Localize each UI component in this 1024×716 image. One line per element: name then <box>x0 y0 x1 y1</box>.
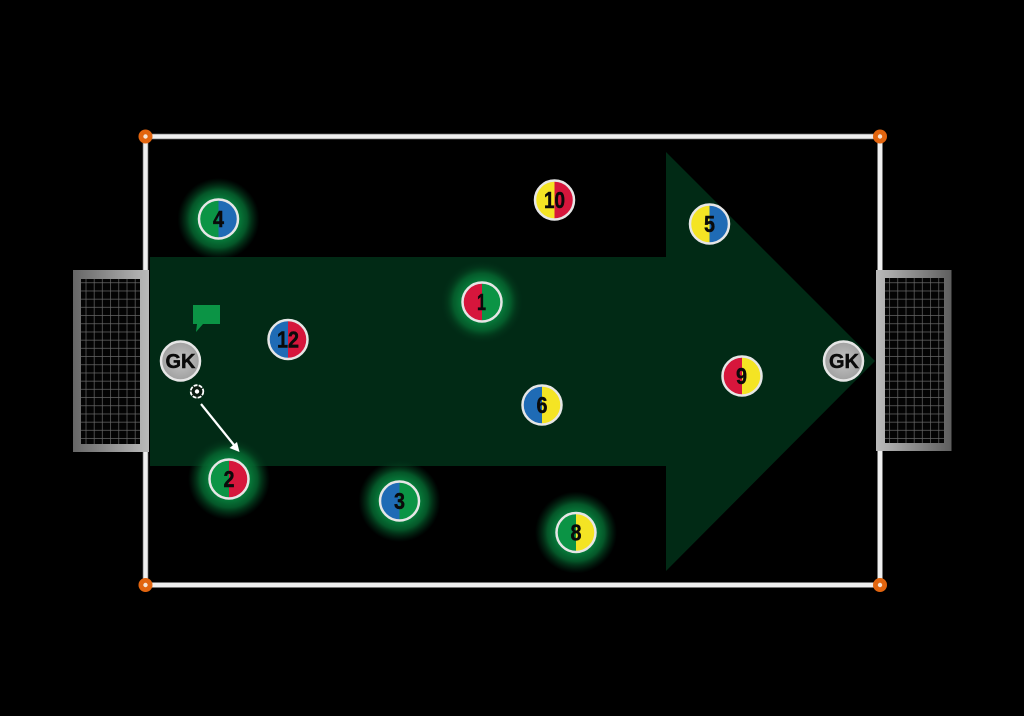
player 6: 6 <box>536 392 548 418</box>
attack direction arrow <box>150 152 875 571</box>
player 3: 3 <box>394 488 405 514</box>
player 3 <box>358 460 440 542</box>
speech bubble icon <box>193 305 220 332</box>
player 2 <box>188 438 270 520</box>
goalkeeper right <box>824 342 863 380</box>
player 10 <box>535 180 574 220</box>
player 9: 9 <box>736 363 747 389</box>
player 8: 8 <box>570 520 582 546</box>
corner marker: bottom left <box>138 578 152 592</box>
player 9 <box>722 356 762 396</box>
corner marker: bottom right <box>873 578 887 592</box>
player 4 <box>178 178 260 260</box>
left goal <box>73 270 149 452</box>
corner marker: top left <box>138 130 152 144</box>
goalkeeper left: GK <box>166 351 196 373</box>
player 5: 5 <box>704 211 715 237</box>
player 10: 10 <box>544 187 565 213</box>
goalkeeper right: GK <box>829 351 860 373</box>
players <box>161 178 863 574</box>
pass arrow <box>201 404 240 452</box>
player 2: 2 <box>224 466 234 492</box>
player 4: 4 <box>213 206 224 232</box>
corner marker: top right <box>873 130 887 144</box>
right goal <box>876 270 952 451</box>
player 1: 1 <box>477 289 486 315</box>
player 5 <box>690 204 729 244</box>
player 8 <box>535 492 617 574</box>
goalkeeper left <box>161 342 200 380</box>
player 12 <box>268 320 308 359</box>
player 12: 12 <box>277 326 299 352</box>
football icon <box>191 385 203 398</box>
player 6 <box>522 386 562 424</box>
player 1 <box>441 261 523 343</box>
pitch boundary <box>146 136 880 585</box>
